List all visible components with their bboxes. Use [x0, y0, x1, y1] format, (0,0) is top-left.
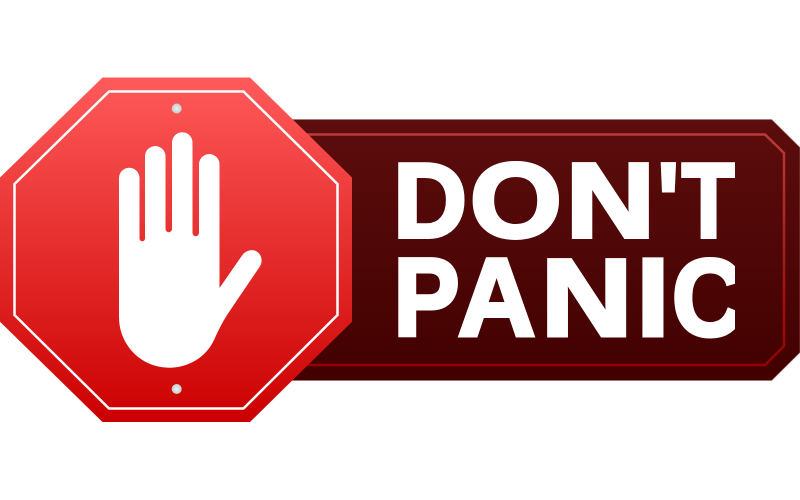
banner panel — [290, 120, 800, 380]
headline line 1: D — [393, 142, 467, 260]
stop sign octagon — [0, 78, 352, 422]
octagon body — [0, 78, 352, 422]
headline line 2: I — [637, 237, 669, 360]
headline line 2: A — [458, 238, 535, 360]
headline line 1: O — [470, 141, 562, 260]
icon: bottom bolt — [172, 384, 182, 394]
headline line 2: C — [672, 237, 744, 360]
headline line 1: T — [682, 141, 735, 260]
icon: top bolt — [172, 104, 182, 114]
headline text — [398, 161, 735, 338]
banner inner outline — [290, 134, 784, 365]
headline line 1: ' — [658, 141, 679, 260]
icon: raised hand — [119, 132, 262, 368]
headline line 2: N — [541, 237, 632, 360]
headline line 1: N — [566, 142, 655, 260]
headline line 2 — [398, 257, 735, 338]
headline line 2: P — [394, 237, 460, 360]
headline line 1 — [398, 161, 735, 240]
octagon inner white outline — [14, 92, 338, 408]
banner background — [290, 120, 800, 380]
infographic: don't panic stop sign — [0, 78, 800, 422]
